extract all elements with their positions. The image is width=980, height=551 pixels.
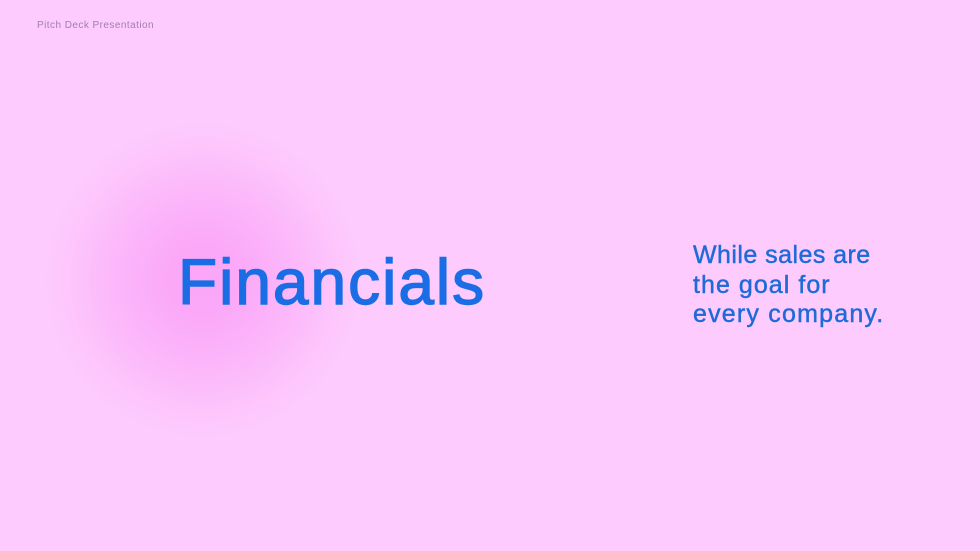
subtitle text: the goal for	[693, 270, 831, 298]
deck label: Pitch Deck Presentation	[37, 20, 154, 31]
title: Financials	[178, 246, 486, 318]
subtitle text: every company.	[693, 300, 884, 328]
subtitle text: While sales are	[693, 241, 871, 269]
gradient blob	[45, 122, 361, 438]
subtitle text	[692, 241, 884, 328]
